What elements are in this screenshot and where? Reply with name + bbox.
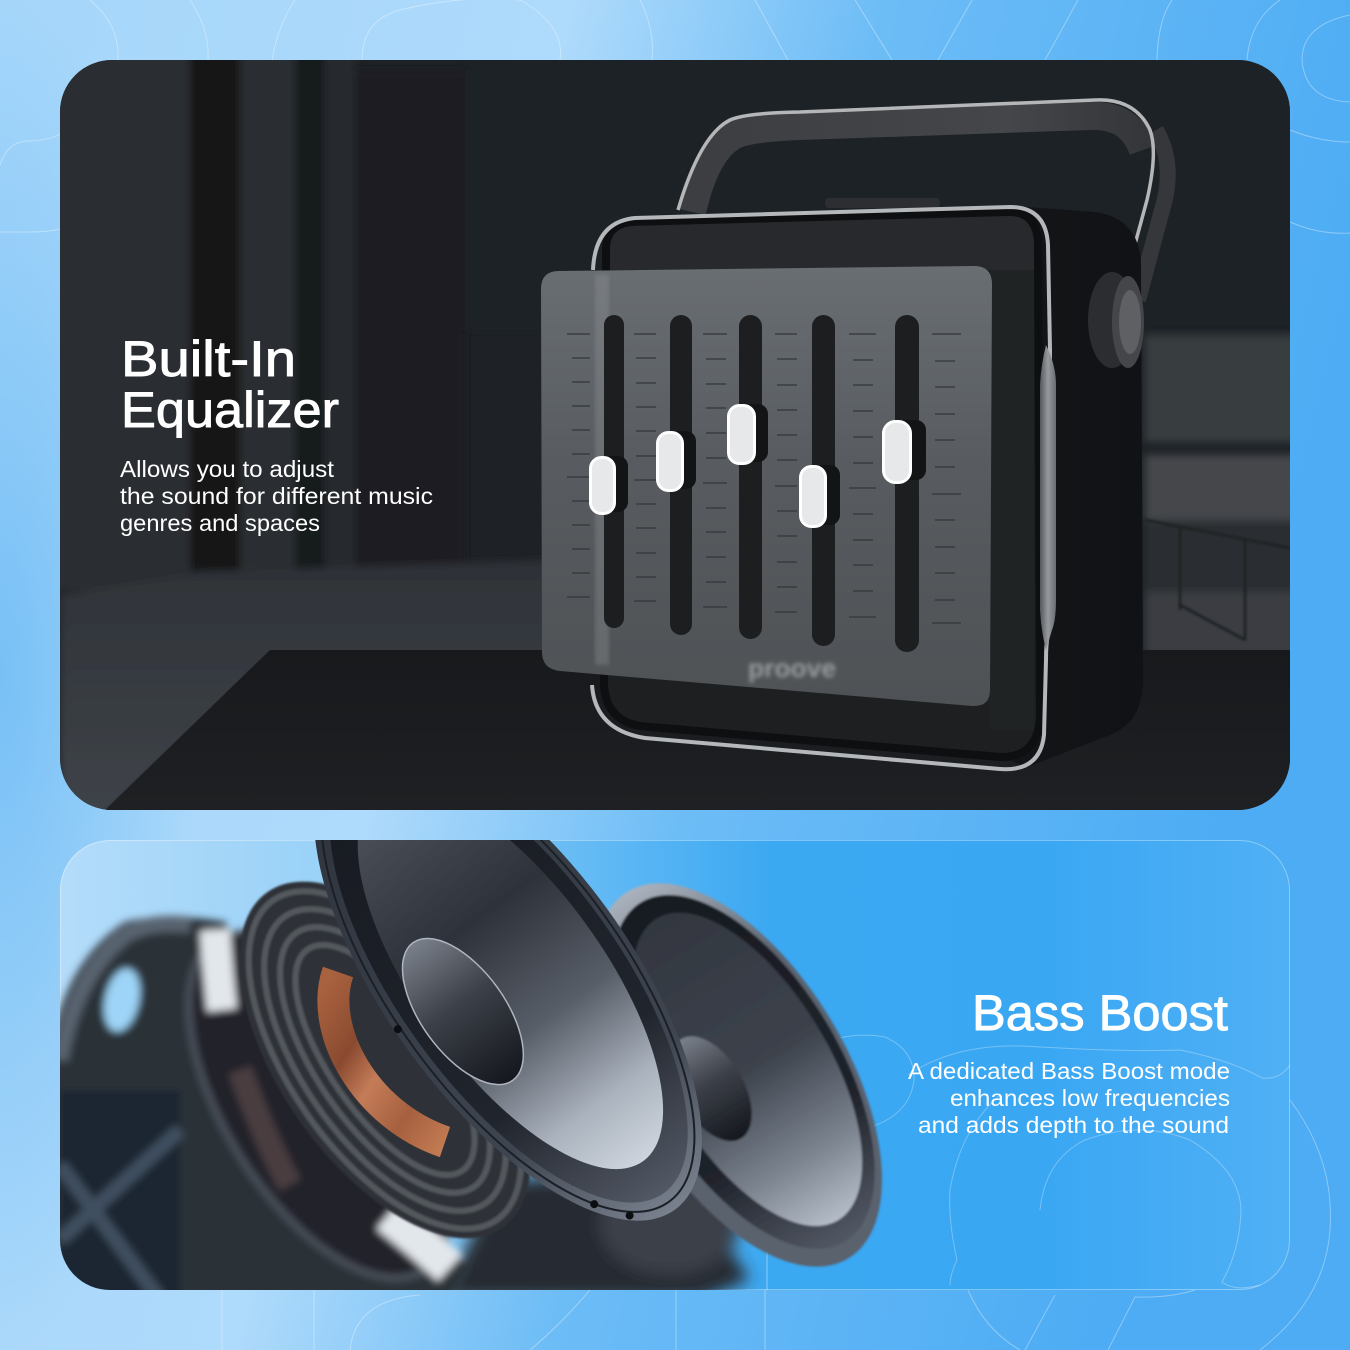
fabric spider	[240, 880, 531, 1240]
text: bass boost description: enhances low frequencies	[950, 1085, 1230, 1111]
rear right driver	[608, 882, 884, 1268]
text: equalizer description	[120, 456, 433, 536]
text: equalizer description: the sound for different music	[120, 483, 433, 509]
panel: built-in equalizer	[40, 50, 1300, 815]
speaker front fabric	[604, 212, 1040, 757]
heading: built-in equalizer: Equalizer	[121, 382, 339, 438]
copper voice coil	[333, 972, 445, 1142]
equalizer tick marks	[567, 334, 961, 623]
speaker front frame	[592, 207, 1050, 769]
heading: built-in equalizer	[121, 331, 339, 438]
front driver	[315, 840, 702, 1221]
speaker body	[1012, 207, 1143, 766]
text: bass boost description: A dedicated Bass Boost mode	[908, 1058, 1230, 1084]
text: bass boost description: and adds depth to the sound	[918, 1112, 1229, 1138]
blurred rear driver	[450, 1175, 760, 1290]
speaker with handle	[541, 100, 1168, 769]
equalizer slots	[604, 315, 919, 652]
speaker handle	[678, 100, 1168, 300]
slider knobs	[590, 404, 926, 526]
handle pivot knob	[1088, 272, 1144, 368]
text: equalizer description: genres and spaces	[120, 510, 320, 536]
heading: built-in equalizer: Built-In	[121, 331, 296, 387]
frosted equalizer panel	[541, 266, 992, 706]
text: bass boost description	[908, 1058, 1230, 1138]
heading: bass boost: Bass Boost	[972, 985, 1228, 1041]
room background	[40, 50, 1300, 815]
blurred brand name: proove	[748, 653, 836, 683]
speaker drivers illustration	[60, 840, 884, 1290]
text: equalizer description: Allows you to adjust	[120, 456, 335, 482]
panel: bass boost	[60, 840, 1290, 1290]
blurred left driver basket	[60, 910, 468, 1290]
dust cap	[402, 938, 524, 1086]
